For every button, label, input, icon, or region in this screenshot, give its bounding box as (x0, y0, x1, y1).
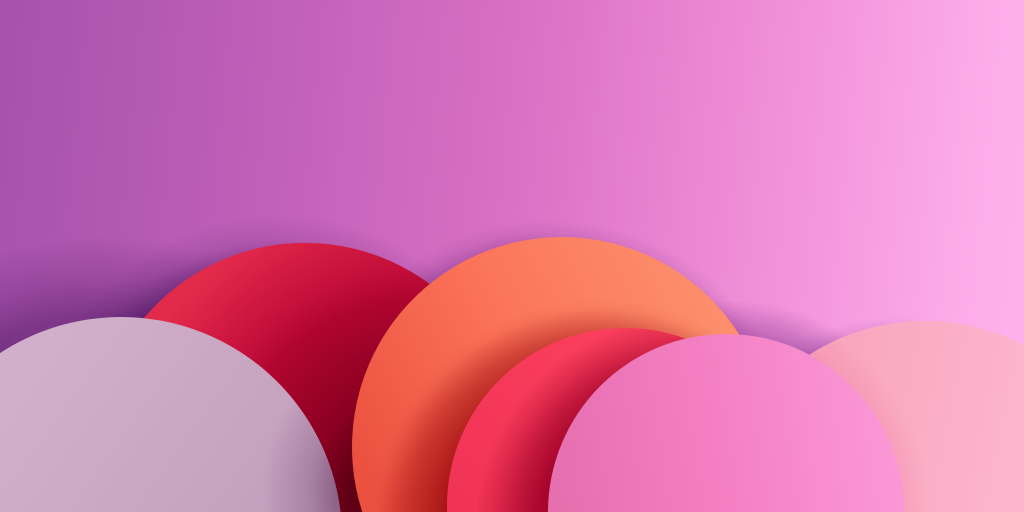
circle: dark red back (95, 243, 515, 512)
circle: light pink right (711, 321, 1024, 512)
circle: grey mauve left (0, 317, 340, 512)
circle: orange (352, 237, 772, 512)
circle: pink front (548, 334, 904, 512)
circle: crimson (447, 328, 803, 512)
